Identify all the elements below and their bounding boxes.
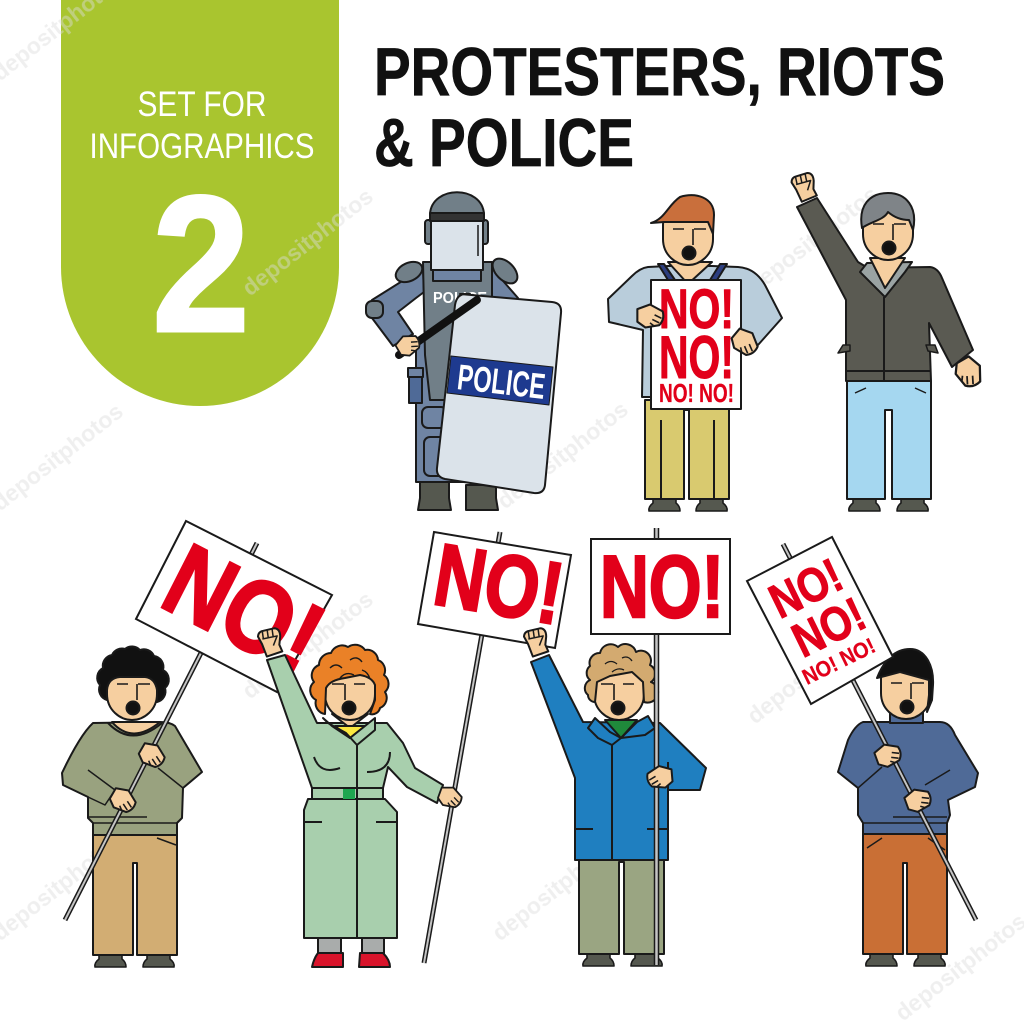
- placard: tilted NO!: NO!: [147, 522, 342, 697]
- title: & POLICE: [374, 105, 634, 181]
- title: [374, 34, 945, 181]
- figure: riot police officer: POLICE: [455, 356, 547, 407]
- badge number: 2: [152, 156, 250, 373]
- placard: tilted NO! NO! NO! NO!: NO!: [761, 549, 851, 629]
- figure: man in blue coat: [523, 528, 706, 966]
- figure: man with sandwich board: NO! NO!: [659, 378, 734, 408]
- placard pole: [65, 543, 257, 920]
- figure: woman in green coat: [257, 532, 500, 967]
- pole: [424, 532, 500, 963]
- figure: man with sandwich board: NO!: [659, 277, 734, 340]
- watermark: depositphotos: [742, 611, 883, 729]
- badge subtitle: INFOGRAPHICS: [90, 127, 314, 166]
- pole: [654, 528, 659, 965]
- placard: tilted NO! NO! NO! NO!: [747, 537, 893, 704]
- placard: tilted NO! NO! NO! NO!: NO!: [784, 588, 874, 668]
- figure: man in blue sweater: [783, 544, 978, 966]
- figure: riot police officer: [366, 192, 561, 510]
- placard: NO! square: NO!: [600, 537, 724, 636]
- figure: riot police officer: POLICE: [433, 290, 487, 307]
- figure: man with sandwich board: NO!: [659, 324, 734, 391]
- watermark: depositphotos: [742, 181, 883, 299]
- green badge: [61, 0, 339, 406]
- figure: man with raised fist: [790, 172, 987, 511]
- badge label: SET FOR: [138, 85, 266, 124]
- placard: NO! on woman's pole: NO!: [428, 525, 570, 643]
- watermark: depositphotos: [237, 586, 378, 704]
- watermark: depositphotos: [492, 396, 633, 514]
- watermark: depositphotos: [487, 828, 628, 946]
- placard: tilted NO! NO! NO! NO!: NO! NO!: [798, 633, 879, 690]
- pole: [783, 544, 976, 920]
- watermark: depositphotos: [237, 183, 378, 301]
- figure: curly-haired man with placard: [62, 543, 257, 967]
- figure: man with sandwich board: [608, 195, 782, 511]
